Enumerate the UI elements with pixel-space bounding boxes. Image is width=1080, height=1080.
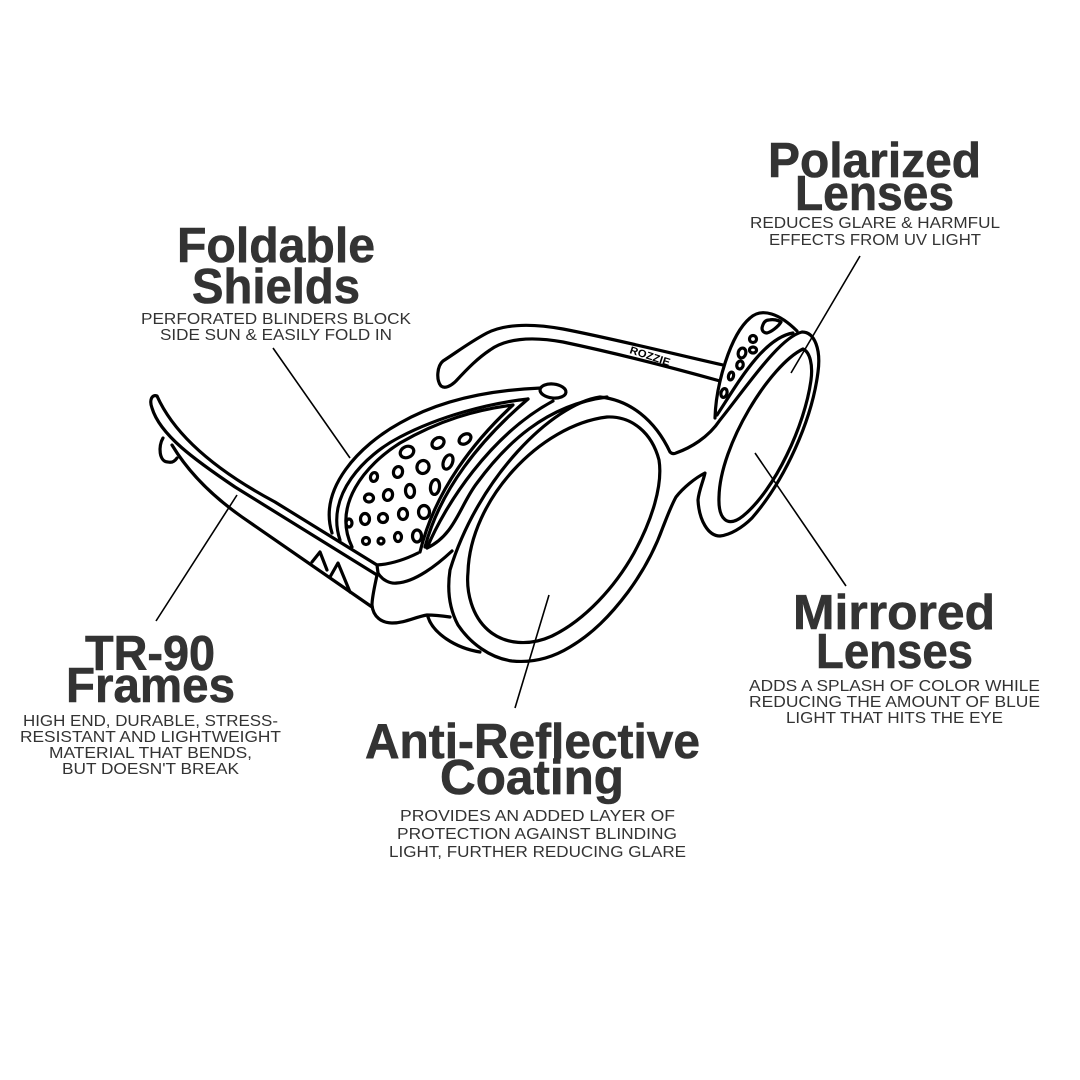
feature: TR-90 frames: TR-90 <box>85 627 215 681</box>
feature: foldable shields <box>141 219 411 344</box>
callout line: mirrored lenses <box>755 453 846 586</box>
front frame outline <box>449 332 819 661</box>
near side shield <box>329 383 607 552</box>
feature: TR-90 frames: BUT DOESN'T BREAK <box>62 761 239 778</box>
feature: polarized lenses: Polarized <box>768 134 981 188</box>
sunglasses illustration <box>151 313 819 661</box>
feature: TR-90 frames <box>20 627 281 778</box>
feature: foldable shields: PERFORATED BLINDERS BLOCK <box>141 311 411 328</box>
feature: foldable shields: Foldable <box>177 219 375 273</box>
far temple arm <box>438 325 723 387</box>
feature: foldable shields: Shields <box>192 260 360 314</box>
end piece upper band <box>377 551 452 583</box>
feature: anti-reflective coating <box>365 715 700 861</box>
feature: TR-90 frames: HIGH END, DURABLE, STRESS- <box>23 713 278 730</box>
near temple arm <box>151 396 377 575</box>
feature: polarized lenses: Lenses <box>795 167 954 221</box>
feature: anti-reflective coating: PROTECTION AGAINST BLINDING <box>397 826 677 843</box>
temple pad <box>160 438 177 462</box>
feature: polarized lenses <box>750 134 1000 249</box>
callout line: polarized lenses <box>791 256 860 373</box>
feature: polarized lenses: EFFECTS FROM UV LIGHT <box>769 232 981 249</box>
feature: mirrored lenses: Mirrored <box>793 586 995 640</box>
shield perforations <box>346 432 473 544</box>
lower shield <box>428 617 480 652</box>
temple logo <box>312 552 350 592</box>
feature: anti-reflective coating: LIGHT, FURTHER REDUCING GLARE <box>389 844 686 861</box>
shield clip <box>539 383 567 399</box>
feature: anti-reflective coating: PROVIDES AN ADDED LAYER OF <box>400 808 675 825</box>
left lens <box>468 417 660 643</box>
far side shield <box>715 313 797 418</box>
shield strips <box>425 399 528 547</box>
callout line: anti-reflective coating <box>515 595 549 708</box>
callout line: TR-90 frames <box>156 495 237 621</box>
callout line: foldable shields <box>273 348 350 458</box>
hinge <box>762 320 781 333</box>
feature: polarized lenses: REDUCES GLARE & HARMFUL <box>750 215 1000 232</box>
feature: mirrored lenses: ADDS A SPLASH OF COLOR WHILE <box>749 678 1040 695</box>
feature: TR-90 frames: MATERIAL THAT BENDS, <box>49 745 252 762</box>
end piece <box>372 575 450 623</box>
feature: TR-90 frames: Frames <box>66 659 235 713</box>
feature: mirrored lenses: Lenses <box>816 625 973 679</box>
right lens <box>719 349 812 522</box>
feature: TR-90 frames: RESISTANT AND LIGHTWEIGHT <box>20 729 281 746</box>
feature: anti-reflective coating: Anti-Reflective <box>365 715 700 769</box>
feature: mirrored lenses: LIGHT THAT HITS THE EYE <box>786 710 1003 727</box>
feature: anti-reflective coating: Coating <box>440 751 624 805</box>
feature: mirrored lenses <box>749 586 1040 727</box>
feature: foldable shields: SIDE SUN & EASILY FOLD IN <box>160 327 392 344</box>
feature: mirrored lenses: REDUCING THE AMOUNT OF BLUE <box>749 694 1040 711</box>
temple logo text: ROZZIE <box>628 344 672 369</box>
